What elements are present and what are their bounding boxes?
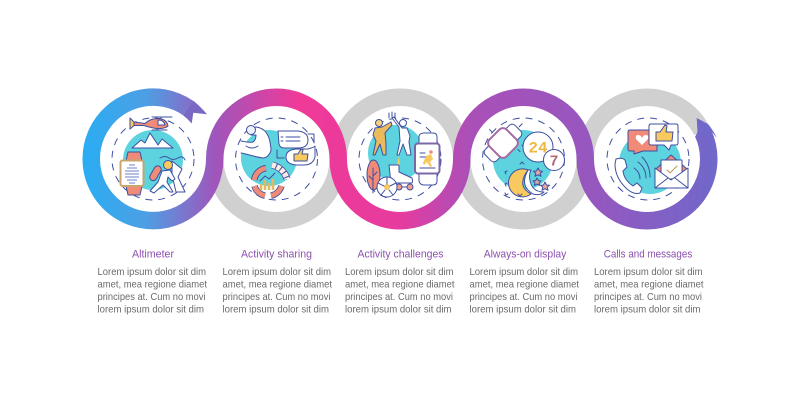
column: activity sharing	[222, 248, 332, 316]
watch	[120, 152, 144, 195]
sound waves	[634, 157, 650, 179]
watch	[415, 133, 440, 185]
icon: altimeter	[112, 117, 194, 200]
envelope	[655, 155, 688, 188]
heading: activity sharing: Activity sharing	[241, 248, 312, 260]
column: activity challenges	[345, 248, 455, 316]
text block: altimeter: amet, mea regione diamet	[98, 280, 207, 290]
text block: always-on display	[470, 267, 579, 316]
roller skate	[389, 156, 413, 190]
text block: calls and messages	[594, 267, 704, 316]
text block: always-on display: amet, mea regione diamet	[470, 280, 579, 290]
high five people	[373, 112, 411, 155]
tree	[367, 160, 380, 193]
text block: activity sharing	[222, 267, 332, 316]
gray ribbon	[215, 97, 702, 221]
heart bubble	[628, 130, 657, 154]
24 bubble: 24	[528, 140, 548, 158]
text block: calls and messages: lorem ipsum dolor sit dim	[594, 304, 700, 316]
heading: activity challenges: Activity challenges	[358, 248, 444, 260]
column: altimeter	[98, 248, 207, 316]
heading: always-on display: Always-on display	[484, 248, 567, 260]
text block: altimeter: Lorem ipsum dolor sit dim	[98, 267, 206, 278]
text block: altimeter: lorem ipsum dolor sit dim	[98, 304, 204, 316]
7 bubble: 7	[549, 154, 559, 170]
text block: activity challenges	[345, 267, 455, 316]
phone handset	[615, 158, 642, 194]
text block: activity challenges: amet, mea regione diamet	[345, 280, 455, 290]
text block: activity challenges: lorem ipsum dolor sit dim	[345, 304, 452, 316]
text block: activity challenges: principes at. Cum no movi	[345, 292, 453, 303]
chevrons	[505, 162, 524, 196]
text block: always-on display: lorem ipsum dolor sit dim	[470, 304, 576, 316]
mountains	[132, 133, 173, 148]
text block: calls and messages: principes at. Cum no movi	[594, 292, 702, 303]
donut chart	[254, 165, 287, 196]
text block: activity sharing: Lorem ipsum dolor sit dim	[222, 267, 331, 278]
text block: altimeter	[98, 267, 207, 316]
icon: always-on display	[475, 110, 564, 200]
stars	[533, 168, 550, 190]
helicopter	[130, 117, 172, 130]
text block: activity sharing: amet, mea regione diamet	[222, 280, 332, 290]
text block: activity sharing: lorem ipsum dolor sit dim	[222, 304, 329, 316]
column: always-on display	[470, 248, 579, 316]
climber	[148, 156, 185, 193]
icon: activity challenges	[359, 112, 441, 200]
comment bubbles	[277, 131, 315, 165]
flexed arm	[241, 126, 271, 158]
text block: calls and messages: Lorem ipsum dolor sit dim	[594, 267, 702, 278]
icon: calls and messages	[607, 118, 689, 200]
text block: altimeter: principes at. Cum no movi	[98, 292, 206, 303]
thumbs up bubble	[649, 124, 678, 150]
icon: activity sharing	[236, 118, 318, 200]
text block: always-on display: Lorem ipsum dolor sit dim	[470, 267, 578, 278]
colored ribbon	[91, 97, 717, 221]
text block: always-on display: principes at. Cum no movi	[470, 292, 578, 303]
tilted watch	[475, 110, 536, 171]
heading: calls and messages: Calls and messages	[604, 248, 692, 260]
text block: activity sharing: principes at. Cum no movi	[222, 292, 330, 303]
moon	[509, 169, 544, 197]
heading: altimeter: Altimeter	[132, 248, 174, 260]
soccer ball	[377, 177, 397, 197]
text block: activity challenges: Lorem ipsum dolor sit dim	[345, 267, 454, 278]
text block: calls and messages: amet, mea regione diamet	[594, 280, 704, 290]
column: calls and messages	[594, 248, 704, 316]
